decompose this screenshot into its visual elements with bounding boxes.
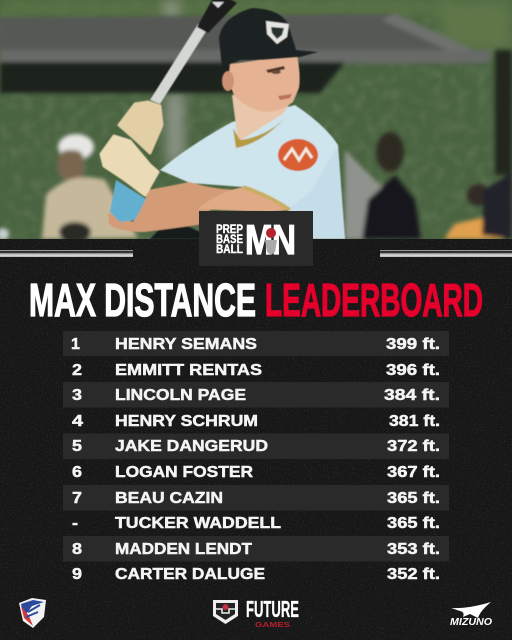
- photo: batter at the plate: [0, 0, 512, 242]
- row 6: LOGAN FOSTER: [115, 464, 253, 481]
- leaderboard table: [63, 331, 449, 583]
- row tied: -: [72, 515, 78, 532]
- row 9: 352 ft.: [387, 566, 440, 583]
- row 7: 365 ft.: [387, 490, 440, 507]
- row 8: [72, 541, 440, 558]
- forearms and skin: [108, 182, 252, 232]
- bat: [150, 0, 237, 104]
- row 1: 1: [71, 336, 80, 353]
- row 6: 6: [72, 464, 82, 481]
- row 3: [72, 387, 440, 404]
- row 8: 8: [72, 541, 82, 558]
- row 7: BEAU CAZIN: [115, 490, 223, 507]
- row 6: 367 ft.: [387, 464, 440, 481]
- cap: [219, 8, 318, 68]
- row 4: [72, 413, 440, 430]
- face: [228, 55, 300, 112]
- logo: Future Games: GAMES: [255, 622, 290, 629]
- jersey: [160, 105, 345, 239]
- row 2: EMMITT RENTAS: [115, 362, 262, 379]
- row 5: [72, 438, 440, 455]
- row 9: 9: [72, 566, 82, 583]
- row 3: LINCOLN PAGE: [115, 387, 246, 404]
- logo: Mizuno: MIZUNO: [450, 617, 492, 628]
- logo: Future Games: FUTURE: [246, 596, 299, 622]
- row 8: 353 ft.: [387, 541, 440, 558]
- row 7: [72, 490, 440, 507]
- row tied: TUCKER WADDELL: [115, 515, 281, 532]
- zigzag divider left: [0, 250, 133, 257]
- row 9: [72, 566, 440, 583]
- row 4: 381 ft.: [389, 413, 440, 430]
- row 9: CARTER DALUGE: [115, 566, 265, 583]
- neck: [232, 95, 292, 142]
- logo: Prep Baseball MN: PREP: [216, 222, 243, 236]
- row 1: 399 ft.: [386, 336, 440, 353]
- zigzag divider right: [380, 250, 512, 257]
- logo: Prep Baseball MN: N: [272, 216, 296, 263]
- logo: Prep Baseball MN: M: [245, 216, 273, 263]
- logo: Prep Baseball MN: BALL: [216, 242, 243, 256]
- icon: shield logo: [19, 598, 46, 628]
- background person: left spectator: [42, 134, 138, 242]
- row 2: 2: [72, 362, 82, 379]
- row 4: 4: [72, 413, 83, 430]
- row 6: [72, 464, 440, 481]
- row 5: 5: [72, 438, 82, 455]
- title: MAX DISTANCE: [29, 274, 256, 326]
- row 2: 396 ft.: [386, 362, 440, 379]
- row 3: 384 ft.: [384, 387, 440, 404]
- logo: Prep Baseball MN: BASE: [216, 232, 243, 246]
- row 8: MADDEN LENDT: [115, 541, 252, 558]
- row 7: 7: [72, 490, 82, 507]
- row 4: HENRY SCHRUM: [115, 413, 258, 430]
- batter: [101, 0, 345, 239]
- wristband: [110, 180, 146, 222]
- background person: right spectators: [0, 132, 512, 240]
- row 1: HENRY SEMANS: [115, 336, 257, 353]
- row stripes: [63, 331, 449, 562]
- gloves: [119, 102, 162, 153]
- logo: Mizuno: [450, 602, 492, 628]
- row 5: 372 ft.: [387, 438, 440, 455]
- row 1: [71, 336, 440, 353]
- row tied: 365 ft.: [387, 515, 440, 532]
- row 2: [72, 362, 440, 379]
- logo: Future Games: [213, 596, 299, 629]
- row 3: 3: [72, 387, 82, 404]
- logo: Prep Baseball MN: [199, 211, 313, 266]
- row tied: [72, 515, 440, 532]
- row 5: JAKE DANGERUD: [115, 438, 268, 455]
- dark panel: [0, 239, 512, 640]
- sleeve logo: [278, 139, 318, 171]
